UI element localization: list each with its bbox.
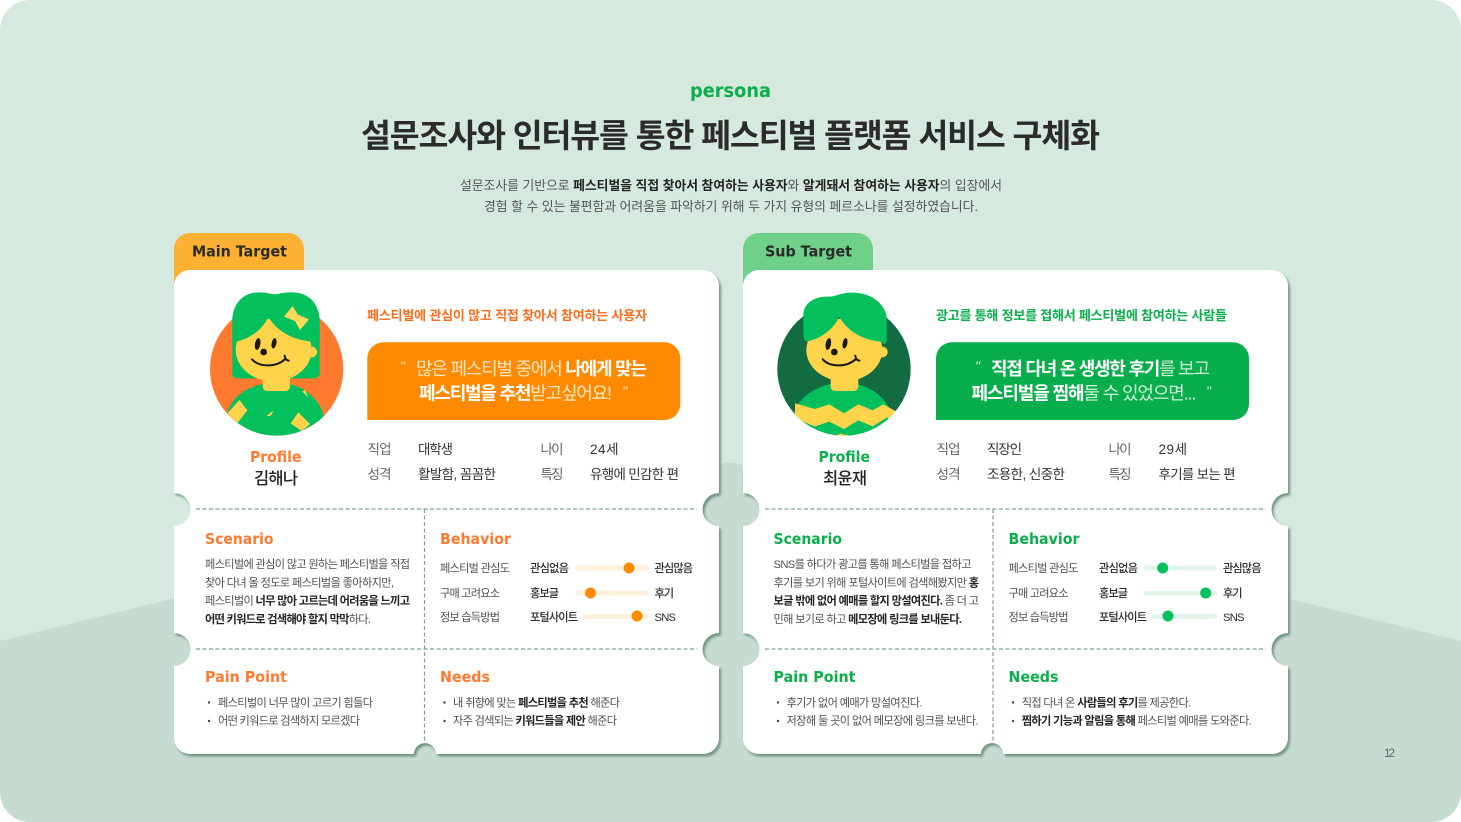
card shape: sub bbox=[743, 270, 1288, 754]
target description: 페스티벌에 관심이 많고 직접 찾아서 참여하는 사용자 bbox=[367, 308, 647, 323]
section: scenario: 민해 보기로 하고 메모장에 링크를 보내둔다. bbox=[774, 612, 962, 626]
section: needs: 찜하기 기능과 알림을 통해 페스티벌 예매를 도와준다. bbox=[1022, 714, 1252, 728]
section: scenario: 어떤 키워드로 검색해야 할지 막막하다. bbox=[205, 612, 371, 626]
section: scenario: 찾아 다녀 올 정도로 페스티벌을 좋아하지만, bbox=[205, 576, 394, 590]
section: needs: 자주 검색되는 키워드들을 제안 해준다 bbox=[453, 714, 617, 728]
section: behavior: 관심없음 bbox=[1099, 562, 1138, 575]
section: scenario: SNS를 하다가 광고를 통해 페스티벌을 접하고 bbox=[774, 557, 972, 571]
profile details: 대학생 bbox=[418, 442, 453, 457]
panel: sub target bbox=[743, 233, 1288, 754]
panel: main target bbox=[174, 233, 719, 754]
section: pain point bbox=[774, 668, 978, 728]
profile details: 조용한, 신중한 bbox=[987, 467, 1065, 482]
section: scenario: Scenario bbox=[774, 530, 842, 548]
section: behavior: 페스티벌 관심도 bbox=[440, 562, 510, 575]
section: behavior: 후기 bbox=[1223, 587, 1242, 600]
tab: main target bbox=[174, 233, 304, 300]
quote box: 많은 페스티벌 중에서 나에게 맞는 bbox=[416, 359, 647, 379]
section: needs: 내 취향에 맞는 페스티벌을 추천 해준다 bbox=[453, 696, 620, 710]
profile details: 성격 bbox=[368, 467, 392, 482]
section: scenario bbox=[205, 530, 410, 626]
tab: main target: Main Target bbox=[192, 242, 287, 260]
dashed dividers bbox=[196, 509, 697, 745]
title: 설문조사와 인터뷰를 통한 페스티벌 플랫폼 서비스 구체화 bbox=[361, 118, 1100, 154]
profile details bbox=[368, 442, 679, 482]
tab: sub target bbox=[743, 233, 873, 300]
page number: 12 bbox=[1384, 746, 1395, 760]
profile label: Profile bbox=[818, 448, 870, 466]
section: pain point: 후기가 없어 예매가 망설여진다. bbox=[786, 696, 922, 710]
profile details: 24세 bbox=[590, 442, 618, 457]
quote box: " bbox=[975, 358, 981, 374]
card shape: main bbox=[174, 270, 719, 754]
section: scenario: 페스티벌에 관심이 많고 원하는 페스티벌을 직접 bbox=[205, 557, 410, 571]
profile name: 김해나 bbox=[254, 469, 298, 488]
section: behavior bbox=[1008, 530, 1262, 624]
section: behavior: 관심없음 bbox=[530, 562, 569, 575]
eyebrow: persona: persona bbox=[690, 79, 771, 102]
section: behavior: SNS bbox=[1223, 612, 1244, 624]
target description: 광고를 통해 정보를 접해서 페스티벌에 참여하는 사람들 bbox=[936, 308, 1227, 323]
section: pain point bbox=[205, 668, 373, 728]
section: pain point: 어떤 키워드로 검색하지 모르겠다 bbox=[218, 714, 360, 728]
profile details: 특징 bbox=[540, 467, 564, 482]
section: needs bbox=[1008, 668, 1252, 728]
profile details: 후기를 보는 편 bbox=[1158, 467, 1236, 482]
section: needs: Needs bbox=[440, 668, 490, 686]
section: pain point: Pain Point bbox=[205, 668, 287, 686]
quote box: " bbox=[1206, 383, 1212, 399]
section: pain point: Pain Point bbox=[774, 668, 856, 686]
section: behavior: 정보 습득방법 bbox=[440, 611, 500, 624]
profile details: 특징 bbox=[1108, 467, 1132, 482]
section: behavior: 구매 고려요소 bbox=[440, 587, 500, 600]
section: behavior: 포털사이트 bbox=[1099, 611, 1147, 624]
tab: sub target: Sub Target bbox=[765, 242, 852, 260]
profile details: 나이 bbox=[540, 442, 564, 457]
section: behavior bbox=[440, 530, 693, 624]
quote box: 페스티벌을 추천받고싶어요! bbox=[419, 384, 612, 404]
section: scenario: 보글 밖에 없어 예매를 할지 망설여진다. 좀 더 고 bbox=[774, 594, 979, 608]
section: behavior: 포털사이트 bbox=[530, 611, 578, 624]
quote box: 직접 다녀 온 생생한 후기를 보고 bbox=[991, 359, 1210, 379]
section: behavior: 구매 고려요소 bbox=[1008, 587, 1068, 600]
section: scenario bbox=[774, 530, 979, 626]
section: behavior: 홍보글 bbox=[530, 586, 559, 600]
section: behavior: 정보 습득방법 bbox=[1008, 611, 1068, 624]
profile details: 활발함, 꼼꼼한 bbox=[418, 467, 496, 482]
intro text: 설문조사를 기반으로 페스티벌을 직접 찾아서 참여하는 사용자와 알게돼서 참여하는 사용자의 입장에서 bbox=[460, 178, 1002, 193]
quote box bbox=[367, 342, 680, 420]
profile details: 나이 bbox=[1108, 442, 1132, 457]
profile details bbox=[936, 442, 1236, 482]
profile name: 최윤재 bbox=[823, 469, 867, 488]
section: behavior: 후기 bbox=[654, 587, 674, 600]
intro text bbox=[460, 178, 1002, 214]
quote box: " bbox=[622, 383, 628, 399]
section: behavior: SNS bbox=[654, 612, 676, 624]
section: behavior: Behavior bbox=[440, 530, 511, 548]
section: scenario: 후기를 보기 위해 포털사이트에 검색해봤지만 홍 bbox=[774, 576, 979, 590]
profile details: 직업 bbox=[368, 442, 392, 457]
profile details: 29세 bbox=[1158, 442, 1187, 457]
profile details: 유행에 민감한 편 bbox=[590, 467, 679, 482]
section: needs bbox=[440, 668, 620, 728]
profile details: 성격 bbox=[936, 467, 960, 482]
section: behavior: 홍보글 bbox=[1099, 586, 1128, 600]
section: scenario: 페스티벌이 너무 많아 고르는데 어려움을 느끼고 bbox=[205, 594, 410, 608]
quote box: " bbox=[400, 358, 406, 374]
section: behavior: 페스티벌 관심도 bbox=[1008, 562, 1078, 575]
intro text: 경험 할 수 있는 불편함과 어려움을 파악하기 위해 두 가지 유형의 페르소나를 설정하였습니다. bbox=[484, 199, 978, 214]
profile details: 직장인 bbox=[987, 442, 1022, 457]
section: needs: Needs bbox=[1008, 668, 1058, 686]
quote box: 페스티벌을 찜해둘 수 있었으면... bbox=[972, 384, 1196, 404]
profile label: Profile bbox=[250, 448, 302, 466]
dashed dividers bbox=[765, 509, 1266, 745]
profile details: 직업 bbox=[936, 442, 960, 457]
section: scenario: Scenario bbox=[205, 530, 274, 548]
avatar: 김해나 bbox=[210, 292, 343, 438]
section: behavior: 관심많음 bbox=[1223, 562, 1262, 575]
avatar: 최윤재 bbox=[777, 293, 911, 438]
section: pain point: 저장해 둘 곳이 없어 메모장에 링크를 보낸다. bbox=[786, 714, 978, 728]
section: behavior: Behavior bbox=[1008, 530, 1080, 548]
quote box bbox=[936, 342, 1249, 420]
section: behavior: 관심많음 bbox=[654, 562, 693, 575]
section: needs: 직접 다녀 온 사람들의 후기를 제공한다. bbox=[1022, 696, 1191, 710]
section: pain point: 페스티벌이 너무 많이 고르기 힘들다 bbox=[218, 696, 373, 710]
